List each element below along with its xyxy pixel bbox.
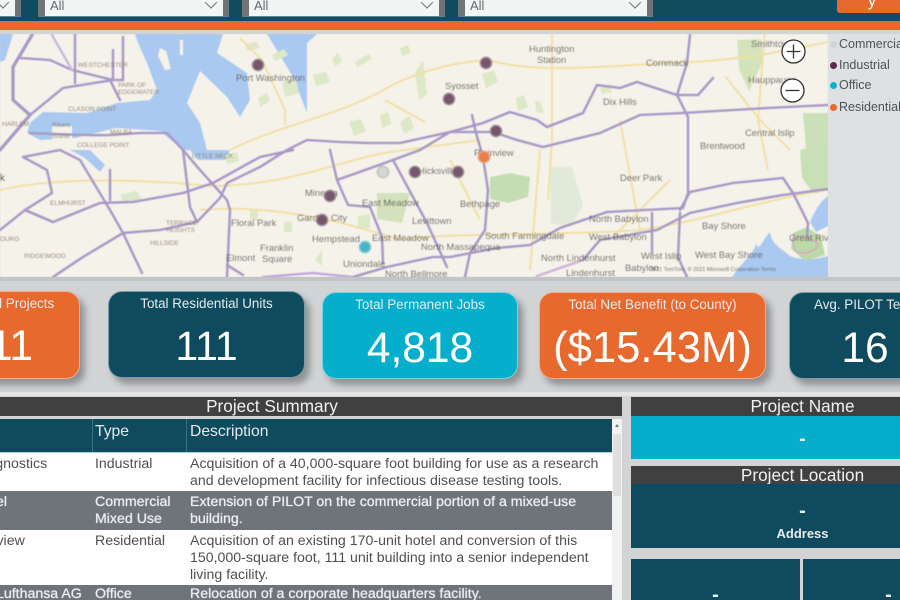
map labels: Elmont	[226, 252, 256, 263]
map labels: Dix Hills	[603, 96, 637, 107]
map labels: COLLEGE POINT	[77, 142, 129, 149]
heading: project name: Project Name	[750, 396, 855, 416]
KPI card: permanent jobs: Total Permanent Jobs	[355, 297, 485, 312]
filter: fourth dropdown	[458, 0, 653, 17]
KPI card: permanent jobs	[322, 292, 518, 379]
table row 3: Residential	[95, 533, 165, 549]
table row 3: living facility.	[190, 567, 268, 583]
table row 3	[0, 530, 612, 585]
table header: Description	[190, 423, 268, 440]
heading: project name	[631, 397, 900, 416]
map labels: Huntington	[529, 43, 574, 54]
project location value	[631, 484, 900, 548]
map labels: West Bay Shore	[695, 249, 763, 260]
heading: project location	[631, 466, 900, 484]
map legend	[828, 34, 900, 277]
map labels: East Meadow	[372, 232, 429, 243]
map labels: Hempstead	[312, 233, 360, 244]
map labels: Bethpage	[460, 198, 500, 209]
map islands	[52, 40, 183, 139]
table row 1	[0, 453, 612, 491]
map labels: Commack	[646, 57, 689, 68]
KPI card: residential units: 111	[175, 323, 238, 369]
map labels: ELMHURST	[50, 200, 86, 207]
map labels: North Massapequa	[421, 241, 501, 252]
table row 2	[0, 491, 612, 530]
heading: project location: Project Location	[741, 465, 864, 485]
header band with filters	[0, 0, 900, 21]
map labels: Port Washington	[236, 72, 305, 83]
map labels: Station	[537, 54, 566, 65]
map markers	[252, 57, 502, 253]
filter: second dropdown	[38, 0, 229, 17]
map highways	[0, 35, 828, 277]
KPI card: net benefit	[539, 292, 766, 379]
map labels: HEIGHTS	[166, 227, 196, 234]
table row 2: Mixed Use	[95, 511, 162, 527]
table row 1: Industrial	[95, 456, 152, 472]
map zoom in button	[781, 39, 806, 64]
map labels: Island	[52, 133, 70, 140]
KPI card: average PILOT term: 16	[841, 325, 889, 372]
band beneath map	[0, 277, 900, 281]
map labels: Syosset	[445, 80, 479, 91]
KPI card: total projects	[0, 291, 80, 379]
map labels: Square	[262, 253, 292, 264]
map	[0, 34, 828, 277]
map labels: South Farmingdale	[485, 230, 564, 241]
table row 3: 150,000-square foot, 111 unit building into a senior independent	[190, 550, 589, 566]
detail tile left	[631, 559, 800, 600]
map labels: Hicksville	[418, 165, 457, 176]
table row 3: Acquisition of an existing 170-unit hotel and conversion of this	[190, 533, 577, 549]
map labels: Garden City	[297, 212, 347, 223]
map labels: Brentwood	[700, 140, 745, 151]
detail tile right	[803, 559, 900, 600]
project location value: -	[799, 500, 806, 522]
table row 2: Extension of PILOT on the commercial portion of a mixed-use	[190, 494, 576, 510]
map labels: Smithtown	[751, 38, 795, 49]
map zoom out button	[780, 78, 805, 103]
KPI card: net benefit: Total Net Benefit (to County)	[568, 297, 737, 312]
map labels: Babylon	[625, 262, 659, 273]
map labels: Rikers	[52, 122, 71, 129]
map labels: OURG	[0, 236, 20, 243]
table row 4	[0, 585, 612, 600]
KPI card: permanent jobs: 4,818	[367, 325, 473, 372]
map labels: West Babylon	[589, 231, 647, 242]
project location value: Address	[776, 526, 829, 541]
table scrollbar	[612, 419, 622, 600]
table row 2: building.	[190, 511, 243, 527]
filter: first dropdown	[0, 0, 21, 17]
map labels: Uniondale	[343, 258, 385, 269]
map labels: North Lindenhurst	[541, 252, 616, 263]
map labels: Levittown	[412, 215, 452, 226]
map labels: HILLSIDE	[150, 240, 180, 247]
map labels: Plainview	[474, 147, 514, 158]
map minor roads	[0, 30, 828, 270]
table header	[0, 419, 612, 453]
table header: Type	[95, 423, 129, 440]
project name value: -	[799, 428, 806, 450]
map labels	[0, 38, 837, 279]
map labels: Central Islip	[745, 127, 794, 138]
map labels: TERRACE	[166, 220, 198, 227]
map labels: HARLEM	[2, 121, 29, 128]
map labels: North Babylon	[589, 213, 648, 224]
map labels: PARK OF	[118, 82, 146, 89]
map parks	[120, 39, 828, 266]
project name value	[631, 416, 900, 459]
map labels: k	[0, 173, 6, 184]
map labels: MALBA	[110, 129, 133, 136]
map labels: EDGEWATER	[118, 89, 159, 96]
map labels: Franklin	[260, 242, 293, 253]
map labels: East Meadow	[362, 197, 419, 208]
heading: project summary	[0, 397, 622, 416]
KPI card: residential units	[108, 291, 305, 378]
table row 1: Acquisition of a 40,000-square foot building for use as a research	[190, 456, 598, 472]
map labels: CLASON POINT	[68, 106, 116, 113]
project summary table	[0, 419, 622, 600]
legend: office: Office	[839, 78, 871, 92]
table row 1: and development facility for infectious disease testing tools.	[190, 473, 562, 489]
KPI card: residential units: Total Residential Units	[140, 296, 273, 311]
map labels: West Islip	[641, 250, 681, 261]
map labels: LITTLE NECK	[192, 153, 234, 160]
map labels: Bay Shore	[702, 220, 746, 231]
legend: industrial: Industrial	[839, 58, 890, 72]
table row 2: Commercial	[95, 494, 171, 510]
filter: third dropdown	[242, 0, 445, 17]
orange divider	[0, 21, 900, 30]
map labels: Deer Park	[620, 172, 663, 183]
legend: residential: Residential	[839, 100, 900, 114]
map labels: 2021 TomTom, © 2021 Microsoft Corporation Terms	[650, 266, 776, 273]
map labels: Hauppauge	[748, 74, 796, 85]
map labels: Mineola	[305, 187, 339, 198]
map labels: WESTCHESTER	[78, 62, 128, 69]
map water	[0, 34, 828, 277]
map labels: Floral Park	[231, 217, 277, 228]
map labels: RIDGEWOOD	[24, 253, 66, 260]
light strip above lower panels	[0, 392, 900, 396]
heading: project summary: Project Summary	[206, 396, 338, 416]
KPI card: net benefit: ($15.43M)	[553, 324, 752, 372]
KPI card: average PILOT term	[789, 292, 900, 379]
orange button	[837, 0, 900, 13]
